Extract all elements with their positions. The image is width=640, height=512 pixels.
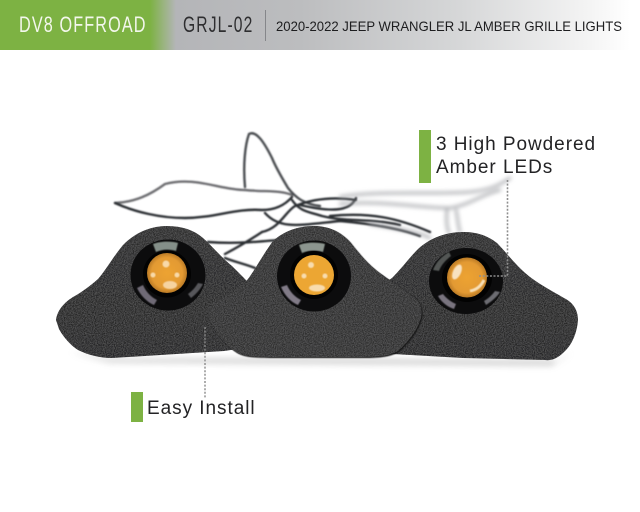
pad shadows [70,352,572,365]
mounting pad: middle [208,226,423,358]
header divider [265,10,266,41]
mounting pad: left [56,226,300,358]
part number: GRJL-02 [183,12,253,37]
callout text: Amber LEDs [436,157,553,178]
LED: middle [277,240,351,312]
leader line: install [204,327,206,398]
mounting pad: right [300,232,578,360]
LED: right [429,248,503,314]
callout text: Easy Install [147,398,256,419]
callout text [436,134,596,178]
callout: Easy Install [131,392,256,422]
callout: 3 High Powdered Amber LEDs [419,130,596,183]
wires [115,133,510,268]
product title: 2020-2022 JEEP WRANGLER JL AMBER GRILLE LIGHTS [276,18,622,34]
leader line: LEDs [479,180,508,277]
callout bar [131,392,143,422]
callout text: 3 High Powdered [436,134,596,155]
LED: left [130,240,206,310]
header band [0,0,640,50]
callout bar [419,130,431,183]
brand name: DV8 OFFROAD [19,12,147,37]
